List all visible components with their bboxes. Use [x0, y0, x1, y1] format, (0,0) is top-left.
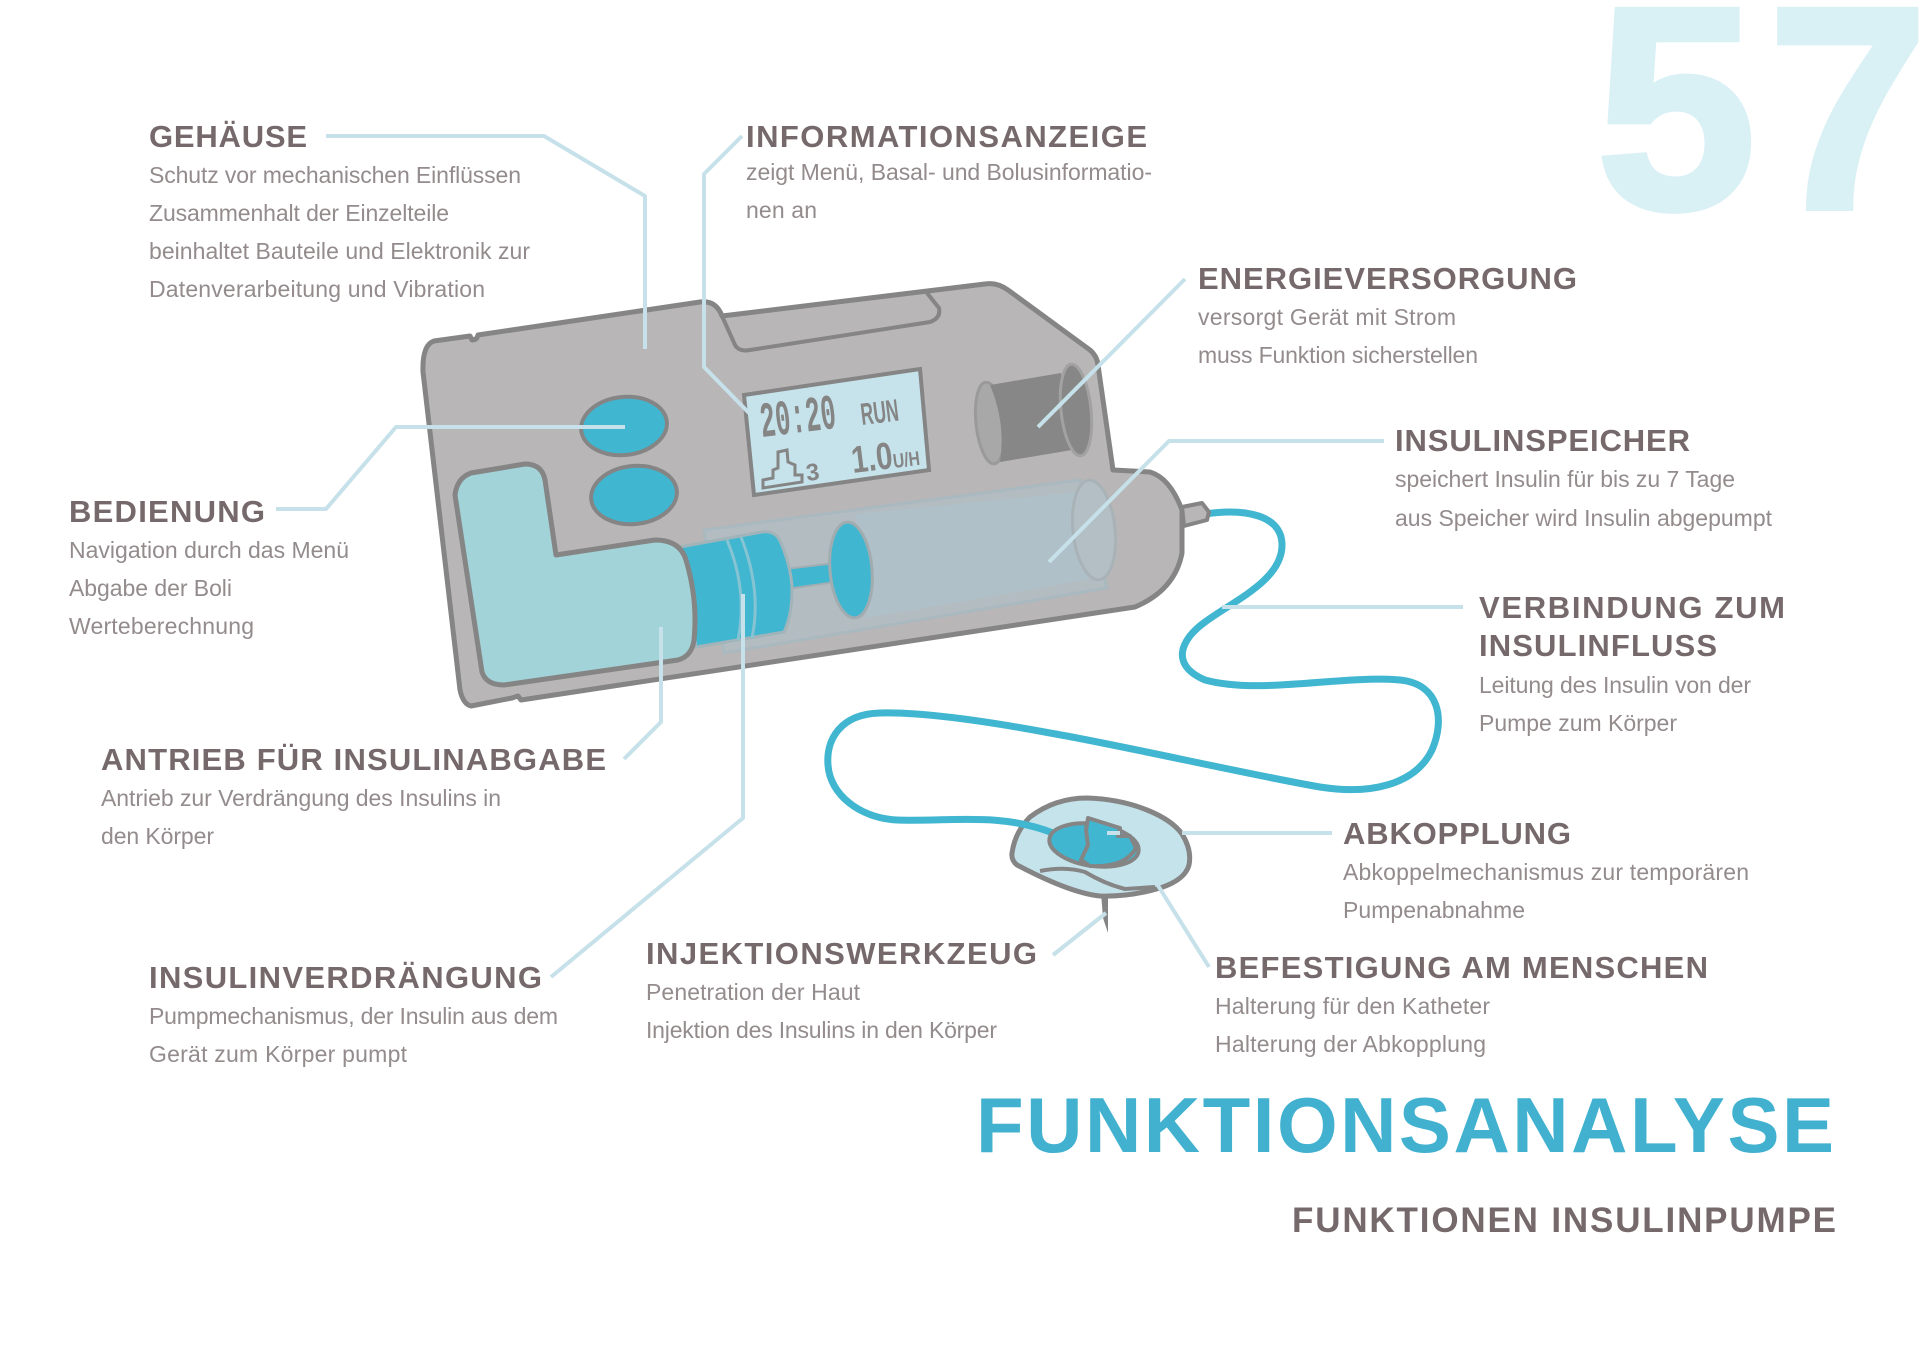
label: Verbindung zum Insulinfluss: VERBINDUNG ZUM — [1479, 590, 1785, 625]
needle — [1101, 893, 1108, 933]
label: Insulinverdrängung — [149, 960, 558, 1067]
label: Gehäuse: Zusammenhalt der Einzelteile — [149, 200, 449, 226]
label: Antrieb für Insulinabgabe: Antrieb zur Verdrängung des Insulins in — [101, 785, 501, 811]
label: Bedienung: BEDIENUNG — [69, 494, 265, 529]
leader Befestigung — [1157, 884, 1209, 967]
title: FUNKTIONSANALYSE — [976, 1081, 1834, 1169]
label: Insulinspeicher: INSULINSPEICHER — [1395, 423, 1690, 458]
label: Energieversorgung — [1198, 261, 1577, 368]
label: Bedienung: Navigation durch das Menü — [69, 537, 349, 563]
label: Informationsanzeige: zeigt Menü, Basal- und Bolusinformatio- — [746, 159, 1152, 185]
label: Insulinverdrängung: Pumpmechanismus, der Insulin aus dem — [149, 1003, 558, 1029]
leader Verbindung — [1222, 605, 1463, 609]
label: Insulinverdrängung: Gerät zum Körper pumpt — [149, 1041, 408, 1067]
label: Insulinspeicher: aus Speicher wird Insulin abgepumpt — [1395, 505, 1773, 531]
label: Antrieb für Insulinabgabe — [101, 742, 606, 849]
label: Gehäuse: beinhaltet Bauteile und Elektronik zur — [149, 238, 530, 264]
label: Energieversorgung: ENERGIEVERSORGUNG — [1198, 261, 1577, 296]
label: Informationsanzeige: nen an — [746, 197, 817, 223]
leader Insulinverdrängung — [551, 594, 743, 977]
insulin reservoir — [704, 478, 1120, 653]
pump housing — [423, 284, 1182, 706]
label: Informationsanzeige: INFORMATIONSANZEIGE — [746, 119, 1147, 154]
rate: 1.0U/H — [849, 432, 922, 482]
leader Bedienung — [276, 427, 625, 509]
label: Befestigung am Menschen: Halterung für den Katheter — [1215, 993, 1490, 1019]
label: Bedienung — [69, 494, 349, 639]
label: Antrieb für Insulinabgabe: ANTRIEB FÜR INSULINABGABE — [101, 742, 606, 777]
reservoir fill — [855, 492, 1097, 618]
label: Verbindung zum Insulinfluss — [1479, 590, 1785, 736]
patch — [1012, 798, 1190, 896]
label: Befestigung am Menschen: Halterung der Abkopplung — [1215, 1031, 1486, 1057]
label: Insulinspeicher — [1395, 423, 1773, 531]
button upper — [578, 393, 670, 459]
time: 20:20 — [757, 387, 839, 453]
label: Abkopplung: Abkoppelmechanismus zur temporären — [1343, 859, 1749, 885]
label: Insulinspeicher: speichert Insulin für bis zu 7 Tage — [1395, 466, 1735, 492]
basal profile icon — [763, 450, 802, 488]
leader Gehäuse — [326, 136, 645, 349]
plunger disc — [826, 520, 876, 620]
battery left end — [972, 381, 1008, 465]
display screen — [744, 369, 929, 495]
leader lines — [276, 136, 1463, 977]
label: Abkopplung — [1343, 816, 1749, 923]
label: Gehäuse: Schutz vor mechanischen Einflüssen — [149, 162, 521, 188]
reservoir tube — [704, 480, 1107, 653]
label: Energieversorgung: versorgt Gerät mit Strom — [1198, 304, 1456, 330]
label: Injektionswerkzeug: INJEKTIONSWERKZEUG — [646, 936, 1037, 971]
label: Verbindung zum Insulinfluss: INSULINFLUSS — [1479, 628, 1717, 663]
label: Verbindung zum Insulinfluss: Leitung des Insulin von der — [1479, 672, 1751, 698]
label: Informationsanzeige — [746, 119, 1152, 223]
patch fold — [1040, 869, 1155, 889]
disconnect detail — [1081, 818, 1136, 866]
label: Befestigung am Menschen — [1215, 950, 1708, 1057]
label: Injektionswerkzeug: Penetration der Haut — [646, 979, 861, 1005]
display — [744, 369, 929, 495]
basal number: 3 — [804, 459, 821, 487]
button lower — [588, 462, 680, 528]
leader Injektionswerkzeug — [1053, 913, 1106, 955]
leader Energieversorgung — [1038, 279, 1185, 427]
label: Insulinverdrängung: INSULINVERDRÄNGUNG — [149, 960, 542, 995]
label: Befestigung am Menschen: BEFESTIGUNG AM MENSCHEN — [1215, 950, 1708, 985]
label: Energieversorgung: muss Funktion sicherstellen — [1198, 342, 1478, 368]
insulin pump illustration — [423, 284, 1438, 933]
label: Bedienung: Abgabe der Boli — [69, 575, 232, 601]
label: Gehäuse — [149, 119, 530, 302]
infusion set — [828, 503, 1438, 933]
drive block — [455, 464, 695, 685]
pump mechanism — [680, 532, 792, 647]
leader Insulinspeicher — [1049, 441, 1384, 562]
battery right end — [1056, 363, 1096, 457]
status: RUN — [859, 393, 901, 432]
tubing — [828, 512, 1438, 833]
label: Antrieb für Insulinabgabe: den Körper — [101, 823, 214, 849]
label: Abkopplung: ABKOPPLUNG — [1343, 816, 1571, 851]
battery body — [990, 373, 1072, 462]
hub — [1047, 818, 1141, 872]
label: Abkopplung: Pumpenabnahme — [1343, 897, 1525, 923]
label: Verbindung zum Insulinfluss: Pumpe zum Körper — [1479, 710, 1677, 736]
leader Informationsanzeige — [704, 136, 749, 413]
label: Bedienung: Werteberechnung — [69, 613, 254, 639]
ring one — [727, 540, 741, 640]
plunger rod — [785, 562, 844, 589]
reservoir end — [1068, 478, 1120, 582]
ring two — [741, 537, 755, 638]
connector — [1182, 503, 1209, 526]
housing recess — [722, 293, 939, 350]
label: Injektionswerkzeug — [646, 936, 1037, 1043]
label: Injektionswerkzeug: Injektion des Insulins in den Körper — [646, 1017, 997, 1043]
leader Antrieb — [624, 627, 661, 759]
subtitle: FUNKTIONEN INSULINPUMPE — [1292, 1201, 1836, 1240]
label: Gehäuse: GEHÄUSE — [149, 119, 307, 154]
pump cylinder — [680, 532, 792, 647]
leader Abkopplung — [1107, 831, 1332, 835]
battery — [972, 363, 1096, 465]
label: Gehäuse: Datenverarbeitung und Vibration — [149, 276, 485, 302]
